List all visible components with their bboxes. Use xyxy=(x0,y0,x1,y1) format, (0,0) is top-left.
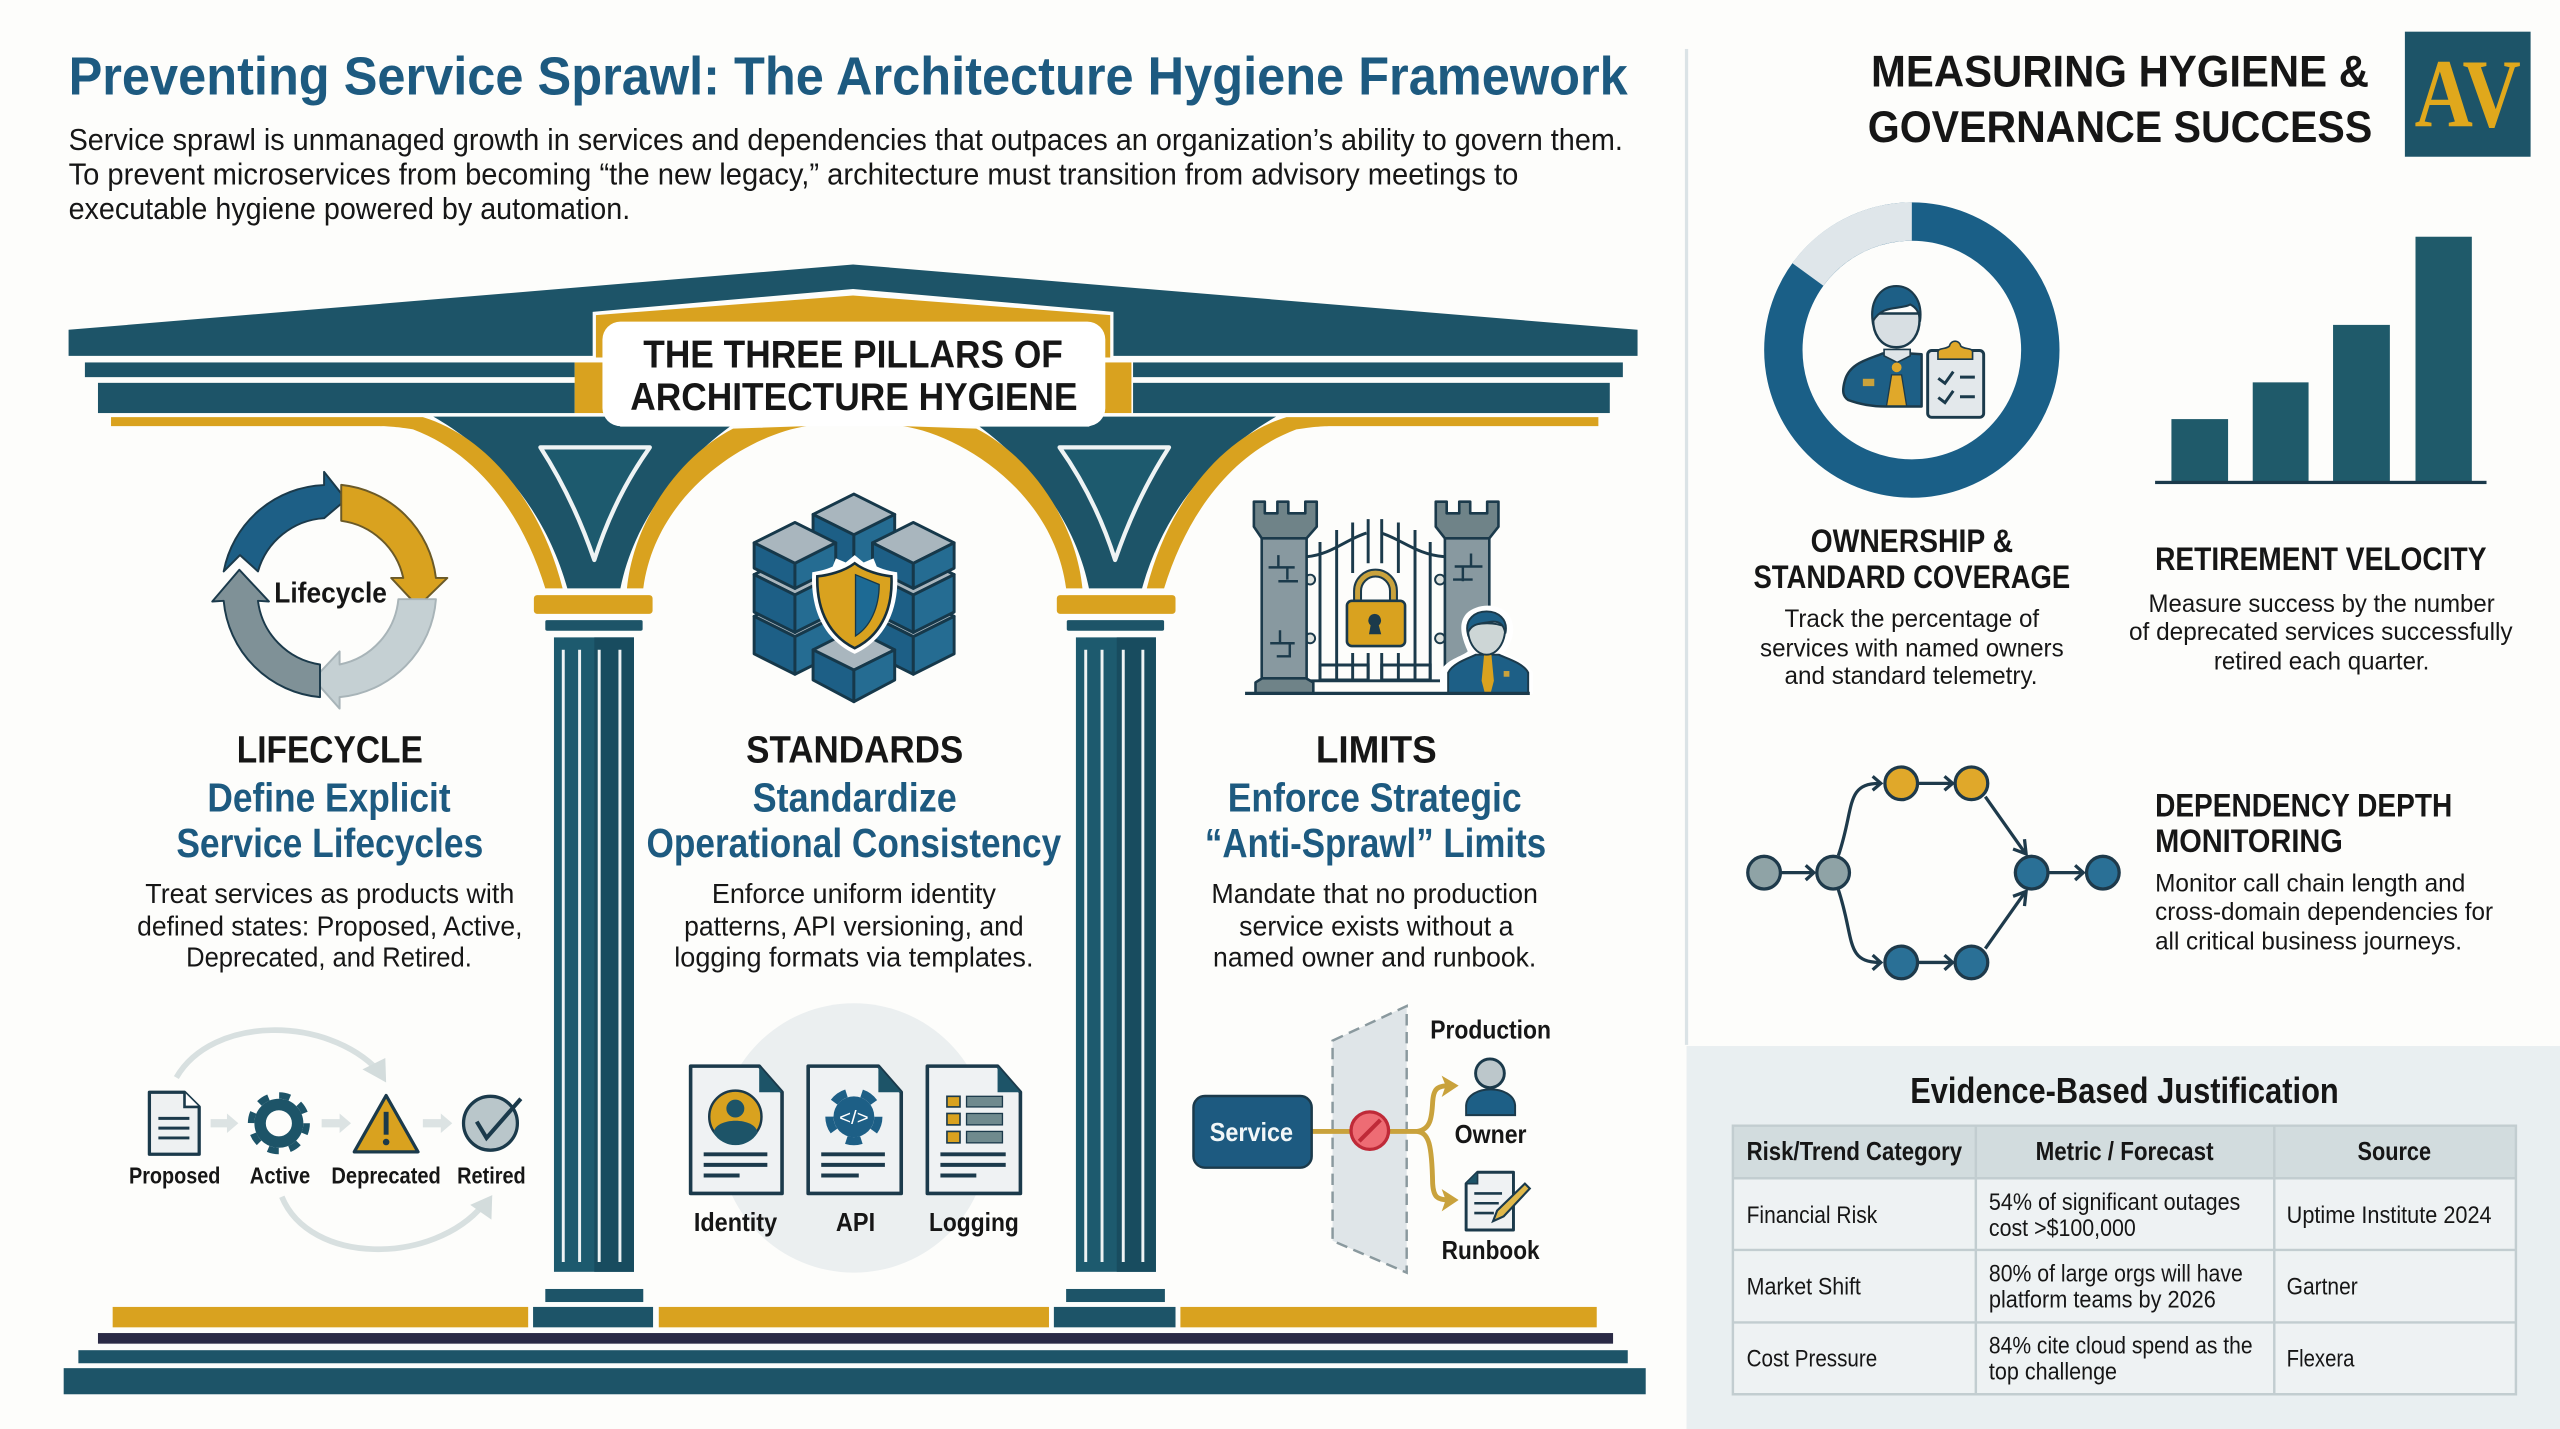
plaque heading: THE THREE PILLARS OF xyxy=(643,333,1063,376)
right heading xyxy=(1868,48,2372,152)
icon: api document xyxy=(808,1066,901,1193)
row: market shift: Gartner xyxy=(2287,1274,2358,1301)
chart: retirement bars xyxy=(2155,237,2487,484)
subheading: define explicit service lifecycles: Define Explicit xyxy=(207,774,451,820)
row: cost pressure: 84% cite cloud spend as the xyxy=(1989,1332,2253,1359)
state labels: Active xyxy=(250,1163,310,1189)
icon: logging document xyxy=(927,1066,1020,1193)
gold connectors xyxy=(1311,1086,1450,1200)
body: ownership: and standard telemetry. xyxy=(1784,662,2038,690)
body: dependency xyxy=(2155,869,2493,955)
icon: lifecycle cycle: Lifecycle xyxy=(274,577,387,609)
subheading: enforce strategic anti-sprawl limits: Enforce Strategic xyxy=(1228,774,1522,820)
body: standards: patterns, API versioning, and xyxy=(684,911,1024,942)
panel: evidence table xyxy=(1687,1046,2560,1429)
heading: evidence: Evidence-Based Justification xyxy=(1910,1070,2339,1111)
subheading: standardize operational consistency: Standardize xyxy=(753,774,957,820)
body: ownership xyxy=(1760,605,2064,690)
icon: cubes and shield xyxy=(754,494,954,702)
temple floor steps xyxy=(64,1307,1646,1394)
template labels: Identity xyxy=(694,1207,778,1237)
state labels: Retired xyxy=(457,1163,526,1189)
row: financial risk: cost >$100,000 xyxy=(1989,1215,2136,1242)
guard xyxy=(1440,606,1533,694)
diagram: lifecycle states xyxy=(129,1030,526,1249)
icon: blocked sign xyxy=(1351,1112,1389,1149)
heading: limits: LIMITS xyxy=(1316,728,1437,770)
plaque heading: ARCHITECTURE HYGIENE xyxy=(630,376,1078,419)
subheading: enforce strategic anti-sprawl limits: “Anti-Sprawl” Limits xyxy=(1205,820,1546,866)
body: lifecycle: defined states: Proposed, Active, xyxy=(137,911,522,942)
table xyxy=(1733,1126,2516,1394)
heading: retirement: RETIREMENT VELOCITY xyxy=(2155,540,2487,577)
row: financial risk: Uptime Institute 2024 xyxy=(2287,1202,2492,1229)
label: owner: Owner xyxy=(1455,1119,1527,1149)
state labels: Deprecated xyxy=(331,1163,441,1189)
panel: retirement metric xyxy=(2129,237,2513,675)
heading: ownership: OWNERSHIP & xyxy=(1811,522,2013,559)
intro text: To prevent microservices from becoming “the new legacy,” architecture must transition from advisory meetings to xyxy=(69,158,1518,191)
column: right xyxy=(1054,595,1176,1327)
icon: lifecycle cycle xyxy=(212,472,447,709)
padlock xyxy=(1358,573,1393,601)
table header: Risk/Trend Category xyxy=(1747,1136,1963,1166)
icon: runbook xyxy=(1466,1172,1530,1230)
row: cost pressure: Cost Pressure xyxy=(1747,1346,1877,1373)
body: ownership: Track the percentage of xyxy=(1784,605,2040,633)
subheading: standardize operational consistency xyxy=(647,774,1061,866)
column: left xyxy=(533,595,653,1327)
body: ownership: services with named owners xyxy=(1760,634,2064,662)
subheading: enforce strategic anti-sprawl limits xyxy=(1205,774,1546,866)
icon: deprecated warning xyxy=(354,1096,418,1152)
body: retirement: retired each quarter. xyxy=(2214,647,2429,675)
intro text xyxy=(69,124,1623,226)
body: dependency: cross-domain dependencies for xyxy=(2155,898,2493,926)
heading: dependency xyxy=(2155,786,2452,859)
heading: dependency: DEPENDENCY DEPTH xyxy=(2155,786,2452,823)
icon: proposed document xyxy=(149,1092,199,1154)
row: financial risk: Financial Risk xyxy=(1747,1202,1878,1229)
logo: AV: AV xyxy=(2415,41,2521,149)
body: standards: logging formats via templates. xyxy=(674,942,1033,973)
body: lifecycle: Deprecated, and Retired. xyxy=(186,942,472,973)
wall xyxy=(1333,1006,1407,1273)
heading: ownership: STANDARD COVERAGE xyxy=(1753,558,2070,595)
panel: standards pillar xyxy=(647,494,1061,1273)
panel: lifecycle pillar xyxy=(129,472,526,1249)
icon: castle gate with lock and guard xyxy=(1245,502,1533,695)
template labels: Logging xyxy=(929,1207,1019,1237)
row: market shift xyxy=(1747,1261,2358,1314)
row: market shift: platform teams by 2026 xyxy=(1989,1287,2216,1314)
table header: Source xyxy=(2358,1136,2431,1166)
heading: dependency: MONITORING xyxy=(2155,822,2343,859)
curved arrows xyxy=(176,1030,492,1249)
body: standards xyxy=(674,878,1033,973)
template labels xyxy=(694,1207,1019,1237)
body: limits: named owner and runbook. xyxy=(1213,942,1536,973)
panel: dependency metric xyxy=(1748,767,2493,979)
row: cost pressure: top challenge xyxy=(1989,1359,2117,1386)
row: cost pressure xyxy=(1747,1332,2355,1386)
icon: active gear xyxy=(251,1096,307,1151)
heading: lifecycle: LIFECYCLE xyxy=(237,728,423,770)
body: limits xyxy=(1211,878,1538,973)
service box: Service xyxy=(1210,1117,1293,1147)
icon: identity document xyxy=(691,1066,782,1193)
subheading: define explicit service lifecycles: Service Lifecycles xyxy=(176,820,483,866)
row: cost pressure: Flexera xyxy=(2287,1346,2355,1373)
body: lifecycle: Treat services as products with xyxy=(145,878,514,909)
intro text: Service sprawl is unmanaged growth in services and dependencies that outpaces an organization’s ability to govern them. xyxy=(69,124,1623,157)
panel: limits pillar xyxy=(1193,502,1551,1273)
row: market shift: Market Shift xyxy=(1747,1274,1861,1301)
body: limits: service exists without a xyxy=(1239,911,1514,942)
icon: api document: </> xyxy=(839,1107,869,1129)
plaque heading xyxy=(630,333,1078,419)
icon: owner with checklist xyxy=(1843,286,1984,417)
diagram: standard templates xyxy=(691,1003,1020,1273)
towers xyxy=(1254,502,1498,693)
right heading: GOVERNANCE SUCCESS xyxy=(1868,103,2372,152)
body: lifecycle xyxy=(137,878,522,973)
body: dependency: all critical business journeys. xyxy=(2155,927,2462,955)
right heading: MEASURING HYGIENE & xyxy=(1871,48,2369,97)
heading: standards: STANDARDS xyxy=(746,728,963,770)
chart: ownership donut xyxy=(1783,222,2040,479)
label: production: Production xyxy=(1430,1014,1551,1044)
tower cracks xyxy=(1269,553,1482,656)
diagram: production gate xyxy=(1193,1006,1551,1273)
state labels: Proposed xyxy=(129,1163,220,1189)
body: dependency: Monitor call chain length and xyxy=(2155,869,2465,897)
icon: owner xyxy=(1466,1059,1515,1115)
body: retirement: of deprecated services successfully xyxy=(2129,618,2513,646)
template labels: API xyxy=(836,1207,875,1237)
intro text: executable hygiene powered by automation. xyxy=(69,193,630,226)
arches and spandrels xyxy=(111,417,1598,588)
temple roof and entablature xyxy=(69,264,1638,426)
small arrows xyxy=(211,1113,452,1133)
gate bars xyxy=(1306,519,1445,693)
title: Preventing Service Sprawl: The Architecture Hygiene Framework xyxy=(69,47,1628,107)
heading: ownership xyxy=(1753,522,2070,595)
table header xyxy=(1747,1136,2431,1166)
table header: Metric / Forecast xyxy=(2036,1136,2214,1166)
panel: ownership metric xyxy=(1753,222,2070,690)
row: financial risk: 54% of significant outages xyxy=(1989,1189,2240,1216)
label: runbook: Runbook xyxy=(1442,1235,1540,1265)
chart: dependency graph xyxy=(1748,767,2119,979)
subheading: define explicit service lifecycles xyxy=(176,774,483,866)
body: retirement: Measure success by the number xyxy=(2149,590,2495,618)
state labels xyxy=(129,1163,526,1189)
service box xyxy=(1193,1096,1312,1168)
icon: retired check xyxy=(464,1096,521,1150)
subheading: standardize operational consistency: Operational Consistency xyxy=(647,820,1061,866)
body: retirement xyxy=(2129,590,2513,675)
body: limits: Mandate that no production xyxy=(1211,878,1538,909)
body: standards: Enforce uniform identity xyxy=(712,878,996,909)
row: financial risk xyxy=(1747,1189,2492,1242)
row: market shift: 80% of large orgs will have xyxy=(1989,1261,2243,1288)
